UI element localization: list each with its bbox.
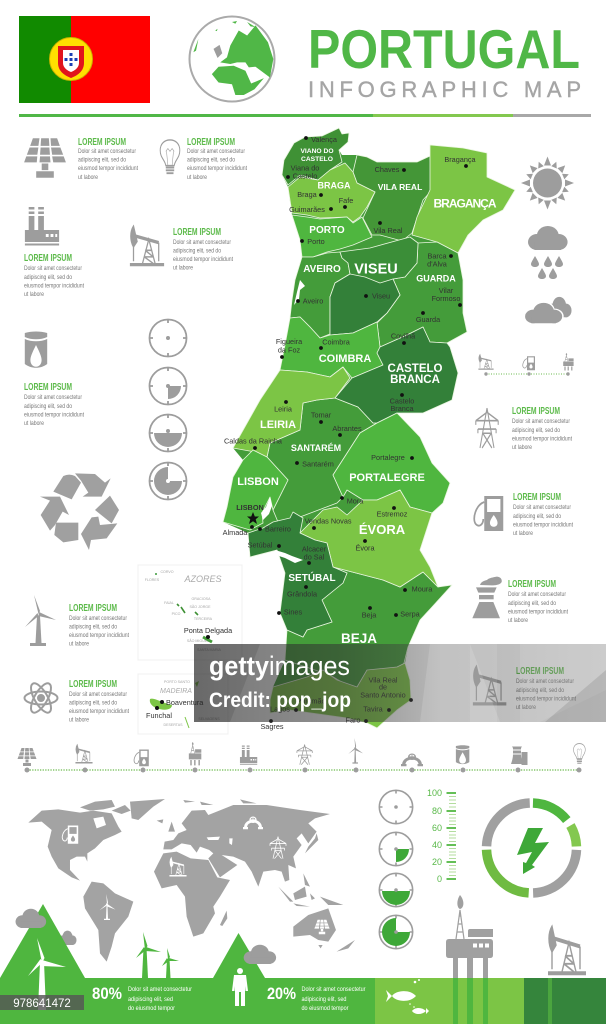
icon: solar panel bbox=[24, 138, 66, 178]
stat: 20 percent bbox=[267, 984, 366, 1012]
inset: Madeira: SELVAGENS bbox=[198, 717, 220, 721]
city names: Chaves bbox=[375, 165, 400, 174]
text block: oil tank: adipiscing elit, sed do bbox=[24, 403, 72, 410]
text block: wind: LOREM IPSUM bbox=[69, 603, 117, 614]
text block: oil pump right: adipiscing elit, sed do bbox=[516, 687, 564, 694]
icon: factory bbox=[25, 207, 59, 246]
world map bbox=[28, 799, 355, 962]
region names: BRAGA bbox=[318, 180, 351, 190]
city names: Alcacer bbox=[302, 544, 327, 554]
city names: Portalegre bbox=[371, 453, 405, 462]
region: Viseu south bbox=[330, 274, 400, 335]
city names: Leiria bbox=[274, 404, 293, 414]
map of Portugal bbox=[223, 128, 515, 731]
text block: oil tank: LOREM IPSUM bbox=[24, 382, 72, 393]
scale 0 to 100: 40 bbox=[432, 840, 442, 850]
offshore rig bbox=[446, 895, 493, 1024]
inset: Azores: CORVO bbox=[160, 570, 174, 574]
region names: ÉVORA bbox=[359, 522, 406, 537]
region names: SANTARÉM bbox=[291, 443, 341, 453]
text block: factory: Dolor sit amet consectetur bbox=[24, 265, 83, 272]
inset: Azores: SÃO MIGUEL bbox=[187, 638, 209, 643]
region names: LEIRIA bbox=[260, 419, 296, 431]
text block: oil pump: Dolor sit amet consectetur bbox=[173, 239, 232, 246]
text block: atom: Dolor sit amet consectetur bbox=[69, 691, 128, 698]
clock gauges: left column bbox=[150, 320, 186, 500]
region: Santarém bbox=[267, 398, 377, 522]
region: Setúbal bbox=[248, 512, 347, 637]
mini timeline: pump, fuel, rig bbox=[478, 353, 574, 376]
scale 0 to 100: 100 bbox=[427, 788, 442, 798]
region names: PORTO bbox=[309, 225, 345, 236]
city names: Porto bbox=[307, 237, 325, 246]
clock gauges: green bbox=[379, 790, 413, 949]
inset: Azores: SANTA MARIA bbox=[197, 648, 222, 652]
scale 0 to 100: 60 bbox=[432, 823, 442, 833]
icon: recycling symbol bbox=[40, 473, 119, 550]
city names: Aveiro bbox=[303, 296, 323, 306]
text block: wind: ut labore bbox=[69, 640, 89, 648]
text block: solar: Dolor sit amet consectetur bbox=[78, 148, 137, 155]
text block: cooling: eiusmod tempor incididunt bbox=[508, 608, 568, 616]
estuaries bbox=[261, 280, 305, 563]
text block: atom: LOREM IPSUM bbox=[69, 679, 117, 690]
scale 0 to 100: 20 bbox=[432, 857, 442, 867]
text block: oil pump right: LOREM IPSUM bbox=[516, 666, 564, 677]
text block: bulb: eiusmod tempor incididunt bbox=[187, 165, 247, 172]
region: Viana do Castelo bbox=[282, 128, 349, 185]
icon timeline bbox=[18, 738, 585, 772]
icon: oil pump bbox=[130, 226, 164, 265]
icon: oil tank bbox=[25, 332, 47, 368]
icon: sun bbox=[521, 156, 574, 210]
text block: oil tank bbox=[24, 382, 84, 427]
icon: lightning bolt bbox=[517, 828, 549, 874]
city names: Fafe bbox=[339, 196, 353, 205]
city names: Santarém bbox=[302, 460, 334, 468]
image id tag: 978641472 bbox=[13, 998, 71, 1010]
text block: solar: adipiscing elit, sed do bbox=[78, 156, 126, 164]
region: Bragança bbox=[412, 145, 515, 253]
region names: VISEU bbox=[354, 262, 398, 278]
text block: wind: adipiscing elit, sed do bbox=[69, 624, 117, 630]
text block: pylon: LOREM IPSUM bbox=[512, 406, 560, 417]
stat: 80 percent: adipiscing elit, sed bbox=[128, 996, 173, 1003]
city names: da Foz bbox=[278, 346, 301, 354]
text block: fuel: adipiscing elit, sed do bbox=[513, 513, 561, 520]
text block: fuel: eiusmod tempor incididunt bbox=[513, 522, 573, 528]
text block: atom: adipiscing elit, sed do bbox=[69, 700, 117, 706]
region names: SETÚBAL bbox=[288, 571, 336, 584]
region names: VILA REAL bbox=[378, 182, 422, 192]
text block: bulb: adipiscing elit, sed do bbox=[187, 156, 235, 164]
city names: Guarda bbox=[416, 315, 441, 324]
icon: oil pump right bbox=[473, 666, 506, 704]
inset: Madeira: DESERTAS bbox=[163, 723, 183, 727]
text block: oil pump right: Dolor sit amet consectetur bbox=[516, 678, 575, 685]
city names: Barreiro bbox=[265, 524, 291, 534]
text block: atom bbox=[69, 679, 129, 724]
inset: Azores: AZORES bbox=[183, 574, 222, 584]
icon: atom bbox=[24, 680, 58, 716]
city names: Sines bbox=[284, 608, 302, 616]
region: Vila Real bbox=[353, 155, 432, 241]
title: INFOGRAPHIC MAP bbox=[308, 77, 581, 102]
city dots bbox=[250, 136, 468, 723]
stat: 80 percent bbox=[92, 984, 193, 1012]
region: Viseu bbox=[330, 237, 418, 335]
region names: PORTALEGRE bbox=[349, 472, 425, 484]
stat: 80 percent: do eiusmod tempor bbox=[128, 1005, 176, 1012]
region: Algarve bbox=[270, 663, 411, 728]
text block: oil pump: LOREM IPSUM bbox=[173, 227, 221, 238]
text block: bulb bbox=[187, 137, 247, 181]
region: Braga bbox=[288, 163, 375, 222]
text block: oil pump: ut labore bbox=[173, 264, 193, 272]
text block: factory: adipiscing elit, sed do bbox=[24, 274, 72, 281]
text block: pylon: ut labore bbox=[512, 444, 532, 451]
text block: factory: ut labore bbox=[24, 291, 44, 298]
city names: d'Alva bbox=[427, 260, 448, 268]
region: Leiria bbox=[233, 367, 350, 457]
region names: AVEIRO bbox=[303, 264, 341, 275]
text block: solar: ut labore bbox=[78, 174, 98, 181]
text block: oil pump right bbox=[516, 666, 576, 711]
inset: Azores: PICO bbox=[172, 612, 181, 616]
city names: Tavira bbox=[363, 704, 384, 714]
region names bbox=[237, 148, 497, 646]
city names: Évora bbox=[355, 544, 375, 552]
city names bbox=[223, 135, 477, 731]
text block: solar: eiusmod tempor incididunt bbox=[78, 165, 138, 172]
inset: Madeira: PORTO SANTO bbox=[164, 680, 190, 684]
stat: 20 percent: adipiscing elit, sed bbox=[302, 996, 347, 1003]
icon: rain cloud bbox=[528, 226, 568, 279]
region names: BRANCA bbox=[390, 374, 440, 386]
text block: solar bbox=[78, 137, 138, 181]
city names: Portimão bbox=[296, 696, 326, 706]
city names: LISBON bbox=[236, 503, 264, 512]
city names: Sagres bbox=[260, 722, 284, 731]
mountain: wind bbox=[0, 904, 85, 978]
stat: 80 percent: 80% bbox=[92, 984, 122, 1003]
city names: Almada bbox=[223, 528, 248, 537]
world map icons bbox=[62, 817, 330, 934]
scale 0 to 100 bbox=[427, 788, 456, 884]
text block: cooling: LOREM IPSUM bbox=[508, 579, 556, 590]
city names: Tomar bbox=[311, 410, 332, 420]
watermark band: Credit: pop_jop bbox=[209, 688, 351, 712]
text block: oil pump bbox=[173, 227, 233, 272]
icon: wind turbine bbox=[25, 595, 56, 646]
header rule bbox=[19, 114, 591, 117]
city names: Castelo bbox=[390, 396, 414, 406]
city names: de bbox=[379, 682, 387, 692]
country silhouette bbox=[223, 128, 515, 728]
city names: Beja bbox=[362, 610, 377, 620]
region: Lisbon bbox=[223, 450, 288, 530]
region: Portalegre bbox=[333, 413, 450, 513]
text block: oil pump: adipiscing elit, sed do bbox=[173, 248, 221, 254]
city names: Vendas Novas bbox=[304, 516, 352, 526]
scale 0 to 100: 80 bbox=[432, 806, 442, 816]
city names: do Sal bbox=[304, 552, 325, 562]
icon: person bbox=[232, 968, 248, 1006]
city names: Serpa bbox=[400, 610, 421, 618]
text block: factory: LOREM IPSUM bbox=[24, 253, 72, 264]
text block: cooling: adipiscing elit, sed do bbox=[508, 600, 556, 607]
inset: Azores: GRACIOSA bbox=[192, 597, 211, 601]
text block: oil pump: eiusmod tempor incididunt bbox=[173, 256, 233, 263]
watermark band bbox=[194, 644, 606, 722]
city names: Figueira bbox=[276, 337, 303, 346]
region: Porto bbox=[292, 215, 372, 257]
text block: pylon: adipiscing elit, sed do bbox=[512, 427, 560, 434]
city names: Bragança bbox=[444, 155, 477, 164]
city names: Lagos bbox=[270, 704, 290, 714]
region names: BRAGANÇA bbox=[434, 196, 497, 210]
text block: factory bbox=[24, 253, 84, 298]
icon: fuel pump bbox=[474, 496, 503, 531]
stat: 20 percent: Dolor sit amet consectetur bbox=[302, 986, 366, 993]
icon: light bulb bbox=[160, 140, 180, 173]
city names: Valença bbox=[311, 135, 338, 144]
stat: 20 percent: 20% bbox=[267, 984, 296, 1003]
city names: Formoso bbox=[432, 294, 460, 303]
stat: 80 percent: Dolor sit amet consectetur bbox=[128, 986, 193, 993]
city names: Faro bbox=[345, 716, 361, 724]
city names: Santo Antonio bbox=[360, 690, 406, 700]
text block: oil tank: ut labore bbox=[24, 420, 44, 427]
region names: GUARDA bbox=[416, 274, 456, 284]
city names: Vilar bbox=[439, 286, 454, 295]
inset: Madeira: MADEIRA bbox=[160, 688, 192, 695]
inset: Madeira: Funchal bbox=[146, 711, 172, 720]
energy ring gauge bbox=[486, 803, 576, 893]
text block: solar: LOREM IPSUM bbox=[78, 137, 126, 148]
city names: Viana do bbox=[291, 164, 319, 172]
inset: Azores: FLORES bbox=[145, 578, 160, 582]
region names: LISBON bbox=[237, 476, 279, 488]
city names: Grândola bbox=[287, 590, 318, 598]
image id tag bbox=[0, 995, 84, 1010]
text block: wind: eiusmod tempor incididunt bbox=[69, 632, 129, 639]
small cloud behind mountain bbox=[58, 931, 76, 945]
city names: Coimbra bbox=[322, 338, 351, 346]
globe with Portugal highlighted bbox=[190, 16, 274, 102]
city names: Castelo bbox=[293, 172, 317, 180]
text block: fuel: LOREM IPSUM bbox=[513, 492, 561, 503]
region: Aveiro bbox=[290, 252, 350, 338]
scale 0 to 100: 0 bbox=[437, 874, 442, 884]
region: Coimbra bbox=[280, 317, 383, 378]
text block: bulb: ut labore bbox=[187, 174, 207, 181]
city names: Guimarães bbox=[289, 205, 325, 214]
title bbox=[308, 18, 581, 102]
region names: VIANO DO bbox=[300, 148, 334, 155]
region: Castelo Branco bbox=[335, 327, 458, 423]
text block: pylon: eiusmod tempor incididunt bbox=[512, 436, 572, 442]
oil pump on the ground bbox=[548, 926, 586, 1024]
region names: CASTELO bbox=[388, 363, 443, 375]
text block: oil tank: Dolor sit amet consectetur bbox=[24, 394, 83, 401]
text block: cooling bbox=[508, 579, 568, 624]
inset: Azores: FAIAL bbox=[164, 601, 174, 605]
city names: Caldas da Rainha bbox=[224, 436, 283, 446]
text block: pylon bbox=[512, 406, 572, 451]
text block: cooling: Dolor sit amet consectetur bbox=[508, 591, 567, 598]
city names: Viseu bbox=[372, 292, 390, 300]
text block: bulb: LOREM IPSUM bbox=[187, 137, 235, 148]
bottom band bbox=[0, 978, 606, 1024]
city names: Vila Real bbox=[373, 226, 403, 235]
text block: fuel: Dolor sit amet consectetur bbox=[513, 504, 572, 511]
city names: Covilhã bbox=[391, 332, 416, 340]
flag of Portugal bbox=[19, 16, 150, 103]
icon: clouds bbox=[523, 297, 572, 324]
watermark band: gettyimages bbox=[209, 651, 350, 681]
white wind turbine bbox=[28, 938, 66, 1010]
text block: wind bbox=[69, 603, 129, 648]
cloud on mountain bbox=[16, 909, 46, 928]
text block: pylon: Dolor sit amet consectetur bbox=[512, 418, 571, 425]
region: Beja bbox=[285, 567, 452, 690]
city names: Mora bbox=[347, 496, 364, 506]
inset: Azores: SÃO JORGE bbox=[190, 604, 211, 609]
mountain: person bbox=[213, 933, 265, 978]
inset: Madeira: Boaventura bbox=[166, 698, 204, 707]
text block: atom: ut labore bbox=[69, 716, 89, 724]
region names: CASTELO bbox=[301, 156, 333, 163]
icon: power pylon bbox=[476, 408, 498, 448]
green wind turbines bbox=[136, 932, 179, 978]
icon: cooling tower bbox=[472, 577, 502, 618]
stat: 20 percent: do eiusmod tempor bbox=[302, 1005, 349, 1012]
inset: Azores: TERCEIRA bbox=[194, 617, 213, 621]
cloud: right of mountain bbox=[244, 945, 276, 964]
region names: BEJA bbox=[341, 631, 377, 646]
text block: oil pump right: eiusmod tempor incididunt bbox=[516, 696, 576, 702]
inset: Madeira bbox=[138, 674, 228, 734]
city names: Moura bbox=[412, 584, 433, 594]
text block: fuel bbox=[513, 492, 573, 537]
city names: Branca bbox=[390, 404, 414, 413]
region: Évora bbox=[300, 490, 438, 587]
text block: atom: eiusmod tempor incididunt bbox=[69, 708, 129, 715]
capital star: Lisbon bbox=[247, 512, 259, 524]
text block: oil tank: eiusmod tempor incididunt bbox=[24, 412, 84, 418]
text block: wind: Dolor sit amet consectetur bbox=[69, 615, 128, 622]
text block: cooling: ut labore bbox=[508, 617, 528, 624]
text block: bulb: Dolor sit amet consectetur bbox=[187, 148, 246, 155]
text block: fuel: ut labore bbox=[513, 530, 533, 537]
city names: Barca bbox=[427, 252, 447, 260]
city names: Braga bbox=[297, 190, 318, 199]
city names: Setúbal bbox=[248, 540, 273, 550]
region: Guarda bbox=[377, 242, 467, 347]
icon: fish bbox=[386, 974, 429, 1014]
inset: Azores: Ponta Delgada bbox=[184, 626, 233, 635]
text block: factory: eiusmod tempor incididunt bbox=[24, 282, 84, 290]
city names: Estremoz bbox=[377, 510, 408, 518]
inset: Azores bbox=[138, 565, 242, 660]
city names: Abrantes bbox=[332, 424, 362, 433]
city names: Vila Real bbox=[368, 676, 398, 684]
text block: oil pump right: ut labore bbox=[516, 704, 536, 711]
region names: COIMBRA bbox=[319, 353, 371, 365]
